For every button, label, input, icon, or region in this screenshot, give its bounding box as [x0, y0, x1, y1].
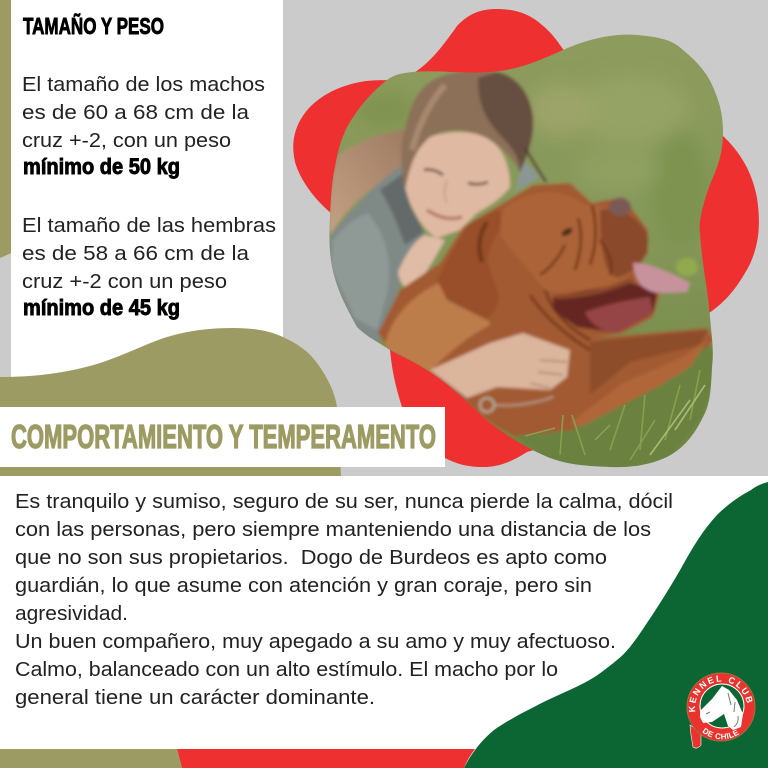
dog eye — [560, 226, 574, 238]
bottom strip: olive — [0, 749, 182, 768]
photo: woman hugging dog on grass — [320, 25, 735, 475]
green wave shape — [464, 482, 768, 768]
text block: comportamiento: con las personas, pero siempre manteniendo una distancia de los — [15, 519, 651, 541]
olive wave shape — [0, 328, 341, 476]
logo: Kennel Club de Chile — [686, 672, 756, 748]
logo: Kennel Club de Chile: DE CHILE — [702, 728, 739, 740]
text block: hembras: mínimo de 45 kg — [23, 295, 180, 320]
dog front leg — [570, 340, 707, 427]
text block: comportamiento: Un buen compañero, muy apegado a su amo y muy afectuoso. — [15, 631, 616, 653]
white banner — [0, 407, 445, 467]
heading: comportamiento y temperamento: COMPORTAMIENTO Y TEMPERAMENTO — [11, 418, 436, 455]
grass background — [320, 25, 735, 475]
dog head — [502, 194, 618, 290]
text block: machos — [22, 74, 265, 179]
text block: hembras — [22, 215, 276, 320]
dog mouth — [553, 283, 657, 333]
text block: comportamiento: Calmo, balanceado con un alto estímulo. El macho por lo — [15, 659, 558, 681]
grass foreground — [516, 346, 712, 458]
text block: machos: es de 60 a 68 cm de la — [22, 102, 250, 124]
text block: comportamiento: agresividad. — [15, 603, 128, 625]
text block: machos: cruz +-2, con un peso — [22, 130, 231, 152]
dog ear — [437, 210, 500, 320]
red blob behind photo — [293, 9, 759, 467]
face — [405, 132, 510, 238]
heading: tamaño y peso: TAMAÑO Y PESO — [23, 12, 164, 39]
dog tongue — [633, 263, 690, 293]
text block: comportamiento — [15, 491, 673, 709]
bottom strip: red — [177, 749, 475, 768]
dog nose — [609, 198, 631, 216]
leaf — [676, 258, 698, 276]
background: white lower area — [0, 476, 768, 768]
woman's forearm and hand — [430, 333, 570, 398]
text block: hembras: cruz +-2 con un peso — [22, 271, 227, 293]
page background: gray upper area — [0, 0, 768, 476]
mouth and eyes — [427, 210, 462, 218]
text block: comportamiento: general tiene un carácter dominante. — [15, 687, 375, 709]
text block: machos: El tamaño de los machos — [22, 74, 265, 96]
sweater — [328, 165, 425, 345]
hand on dog — [398, 235, 445, 288]
text block: hembras: es de 58 a 66 cm de la — [22, 243, 250, 265]
text block: comportamiento: Es tranquilo y sumiso, seguro de su ser, nunca pierde la calma, dócil — [15, 491, 673, 513]
dog body — [378, 183, 714, 456]
dog collar — [495, 397, 553, 405]
dog chest fur — [385, 280, 490, 372]
hair — [400, 72, 522, 188]
dog legs shadow — [590, 330, 707, 395]
text block: comportamiento: guardián, lo que asume con atención y gran coraje, pero sin — [15, 575, 592, 597]
logo text: KENNEL CLUB — [688, 676, 752, 712]
panel: tamaño y peso — [11, 0, 283, 378]
logo dog head — [700, 686, 743, 730]
grass blades — [525, 370, 705, 460]
dog wrinkles — [530, 205, 611, 350]
text block: comportamiento: que no son sus propietarios. Dogo de Burdeos es apto como — [15, 547, 607, 569]
ponytail — [329, 128, 412, 235]
text block: machos: mínimo de 50 kg — [23, 154, 180, 179]
text block: hembras: El tamaño de las hembras — [22, 215, 276, 237]
olive strip at left edge — [0, 0, 11, 258]
logo ribbon — [690, 725, 701, 748]
